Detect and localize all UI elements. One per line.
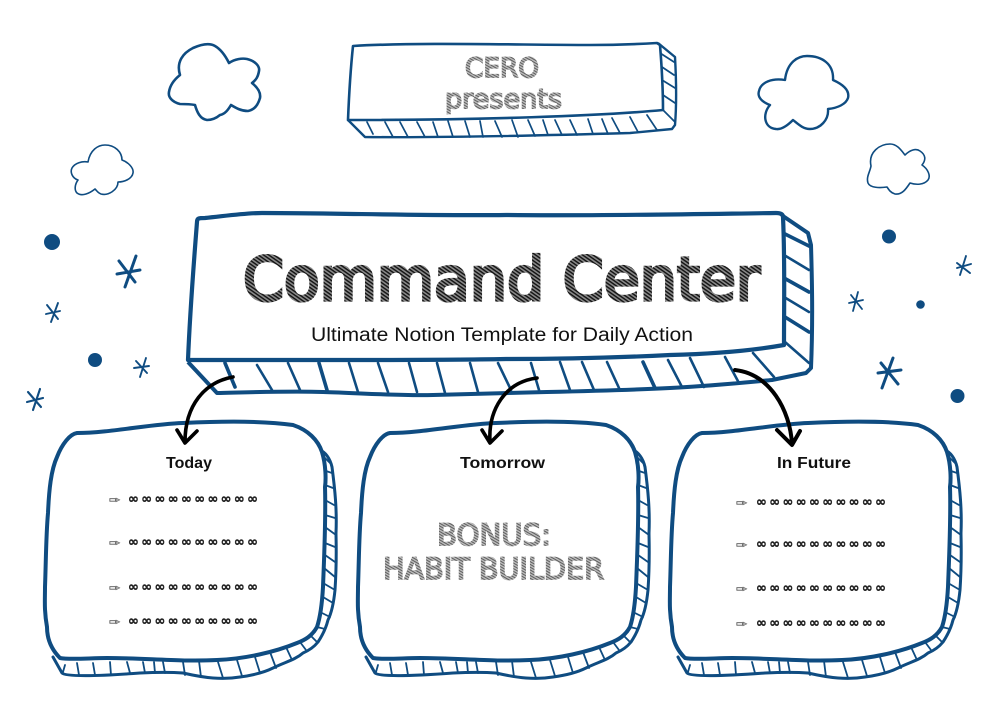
bonus text: BONUS: (437, 518, 551, 552)
icon: cloud top left (169, 44, 260, 120)
list placeholder: In Future: ∞∞∞∞∞∞∞∞∞∞ (756, 616, 886, 631)
decorative dots and stars left (27, 234, 149, 410)
list placeholder: In Future: ∞∞∞∞∞∞∞∞∞∞ (756, 581, 886, 596)
list placeholder: Today: ▭▸ (109, 495, 120, 504)
list placeholder: Today: ▭▸ (109, 617, 120, 626)
bonus text (383, 518, 604, 586)
text: CERO presents: CERO (465, 53, 539, 84)
panel: Command Center main box (188, 213, 812, 395)
arrow: to In Future (735, 370, 800, 445)
icon: cloud top right (759, 56, 848, 129)
arrow: to Tomorrow (482, 378, 537, 443)
list placeholder: In Future: ∞∞∞∞∞∞∞∞∞∞ (756, 537, 886, 552)
subtitle: Ultimate Notion Template for Daily Action (311, 325, 693, 346)
panel: Tomorrow (358, 422, 649, 678)
text: CERO presents: presents (445, 84, 562, 115)
list placeholder: Today: ▭▸ (109, 583, 120, 592)
heading: Today: Today (166, 455, 212, 472)
icon: cloud mid left (71, 145, 133, 195)
arrow: to Today (177, 377, 233, 443)
panel: Today (45, 422, 336, 678)
list placeholder: Today: ∞∞∞∞∞∞∞∞∞∞ (128, 614, 258, 629)
bonus text: HABIT BUILDER (383, 552, 604, 586)
list placeholder: Today: ∞∞∞∞∞∞∞∞∞∞ (128, 580, 258, 595)
text: CERO presents (445, 53, 562, 115)
list placeholder: In Future (736, 495, 886, 631)
icon: cloud mid right (867, 144, 929, 194)
title: Command Center (243, 245, 760, 315)
list placeholder: Today (109, 492, 258, 629)
list placeholder: In Future: ∞∞∞∞∞∞∞∞∞∞ (756, 495, 886, 510)
heading: In Future: In Future (777, 455, 851, 472)
list placeholder: Today: ∞∞∞∞∞∞∞∞∞∞ (128, 492, 258, 507)
list placeholder: In Future: ▭▸ (736, 619, 747, 628)
list placeholder: In Future: ▭▸ (736, 498, 747, 507)
heading: Tomorrow: Tomorrow (460, 455, 546, 472)
panel: In Future (670, 422, 961, 678)
decorative dots and stars right (849, 230, 971, 403)
list placeholder: Today: ▭▸ (109, 538, 120, 547)
panel: CERO presents box (348, 43, 676, 137)
list placeholder: In Future: ▭▸ (736, 540, 747, 549)
list placeholder: In Future: ▭▸ (736, 584, 747, 593)
list placeholder: Today: ∞∞∞∞∞∞∞∞∞∞ (128, 535, 258, 550)
